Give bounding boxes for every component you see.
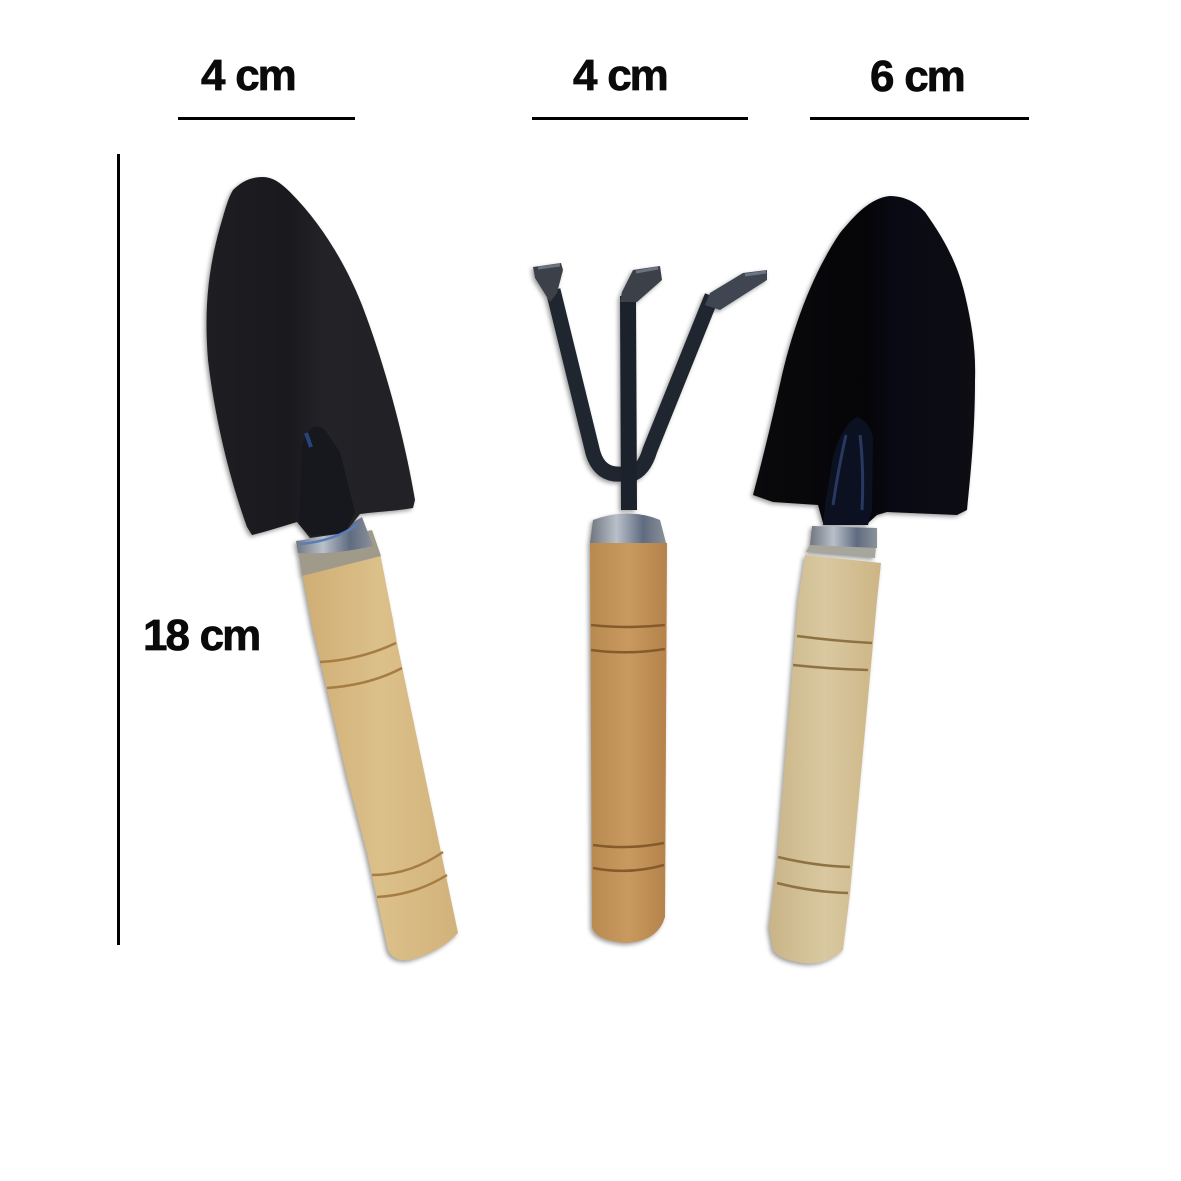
ferrule — [296, 517, 381, 576]
width label: right trowel: 6 cm — [870, 52, 964, 101]
right trowel — [753, 196, 975, 963]
tines — [533, 263, 767, 510]
blade — [206, 177, 415, 544]
width label: left trowel: 4 cm — [201, 51, 295, 100]
ferrule — [590, 514, 666, 543]
handle — [769, 555, 881, 963]
handle — [590, 543, 667, 943]
height label: 18 cm: 18 cm — [143, 611, 259, 660]
left trowel — [206, 177, 458, 960]
blade — [753, 196, 975, 525]
handle — [302, 553, 458, 960]
rake — [533, 263, 767, 943]
width label: rake: 4 cm — [573, 51, 667, 100]
ferrule — [806, 526, 877, 558]
